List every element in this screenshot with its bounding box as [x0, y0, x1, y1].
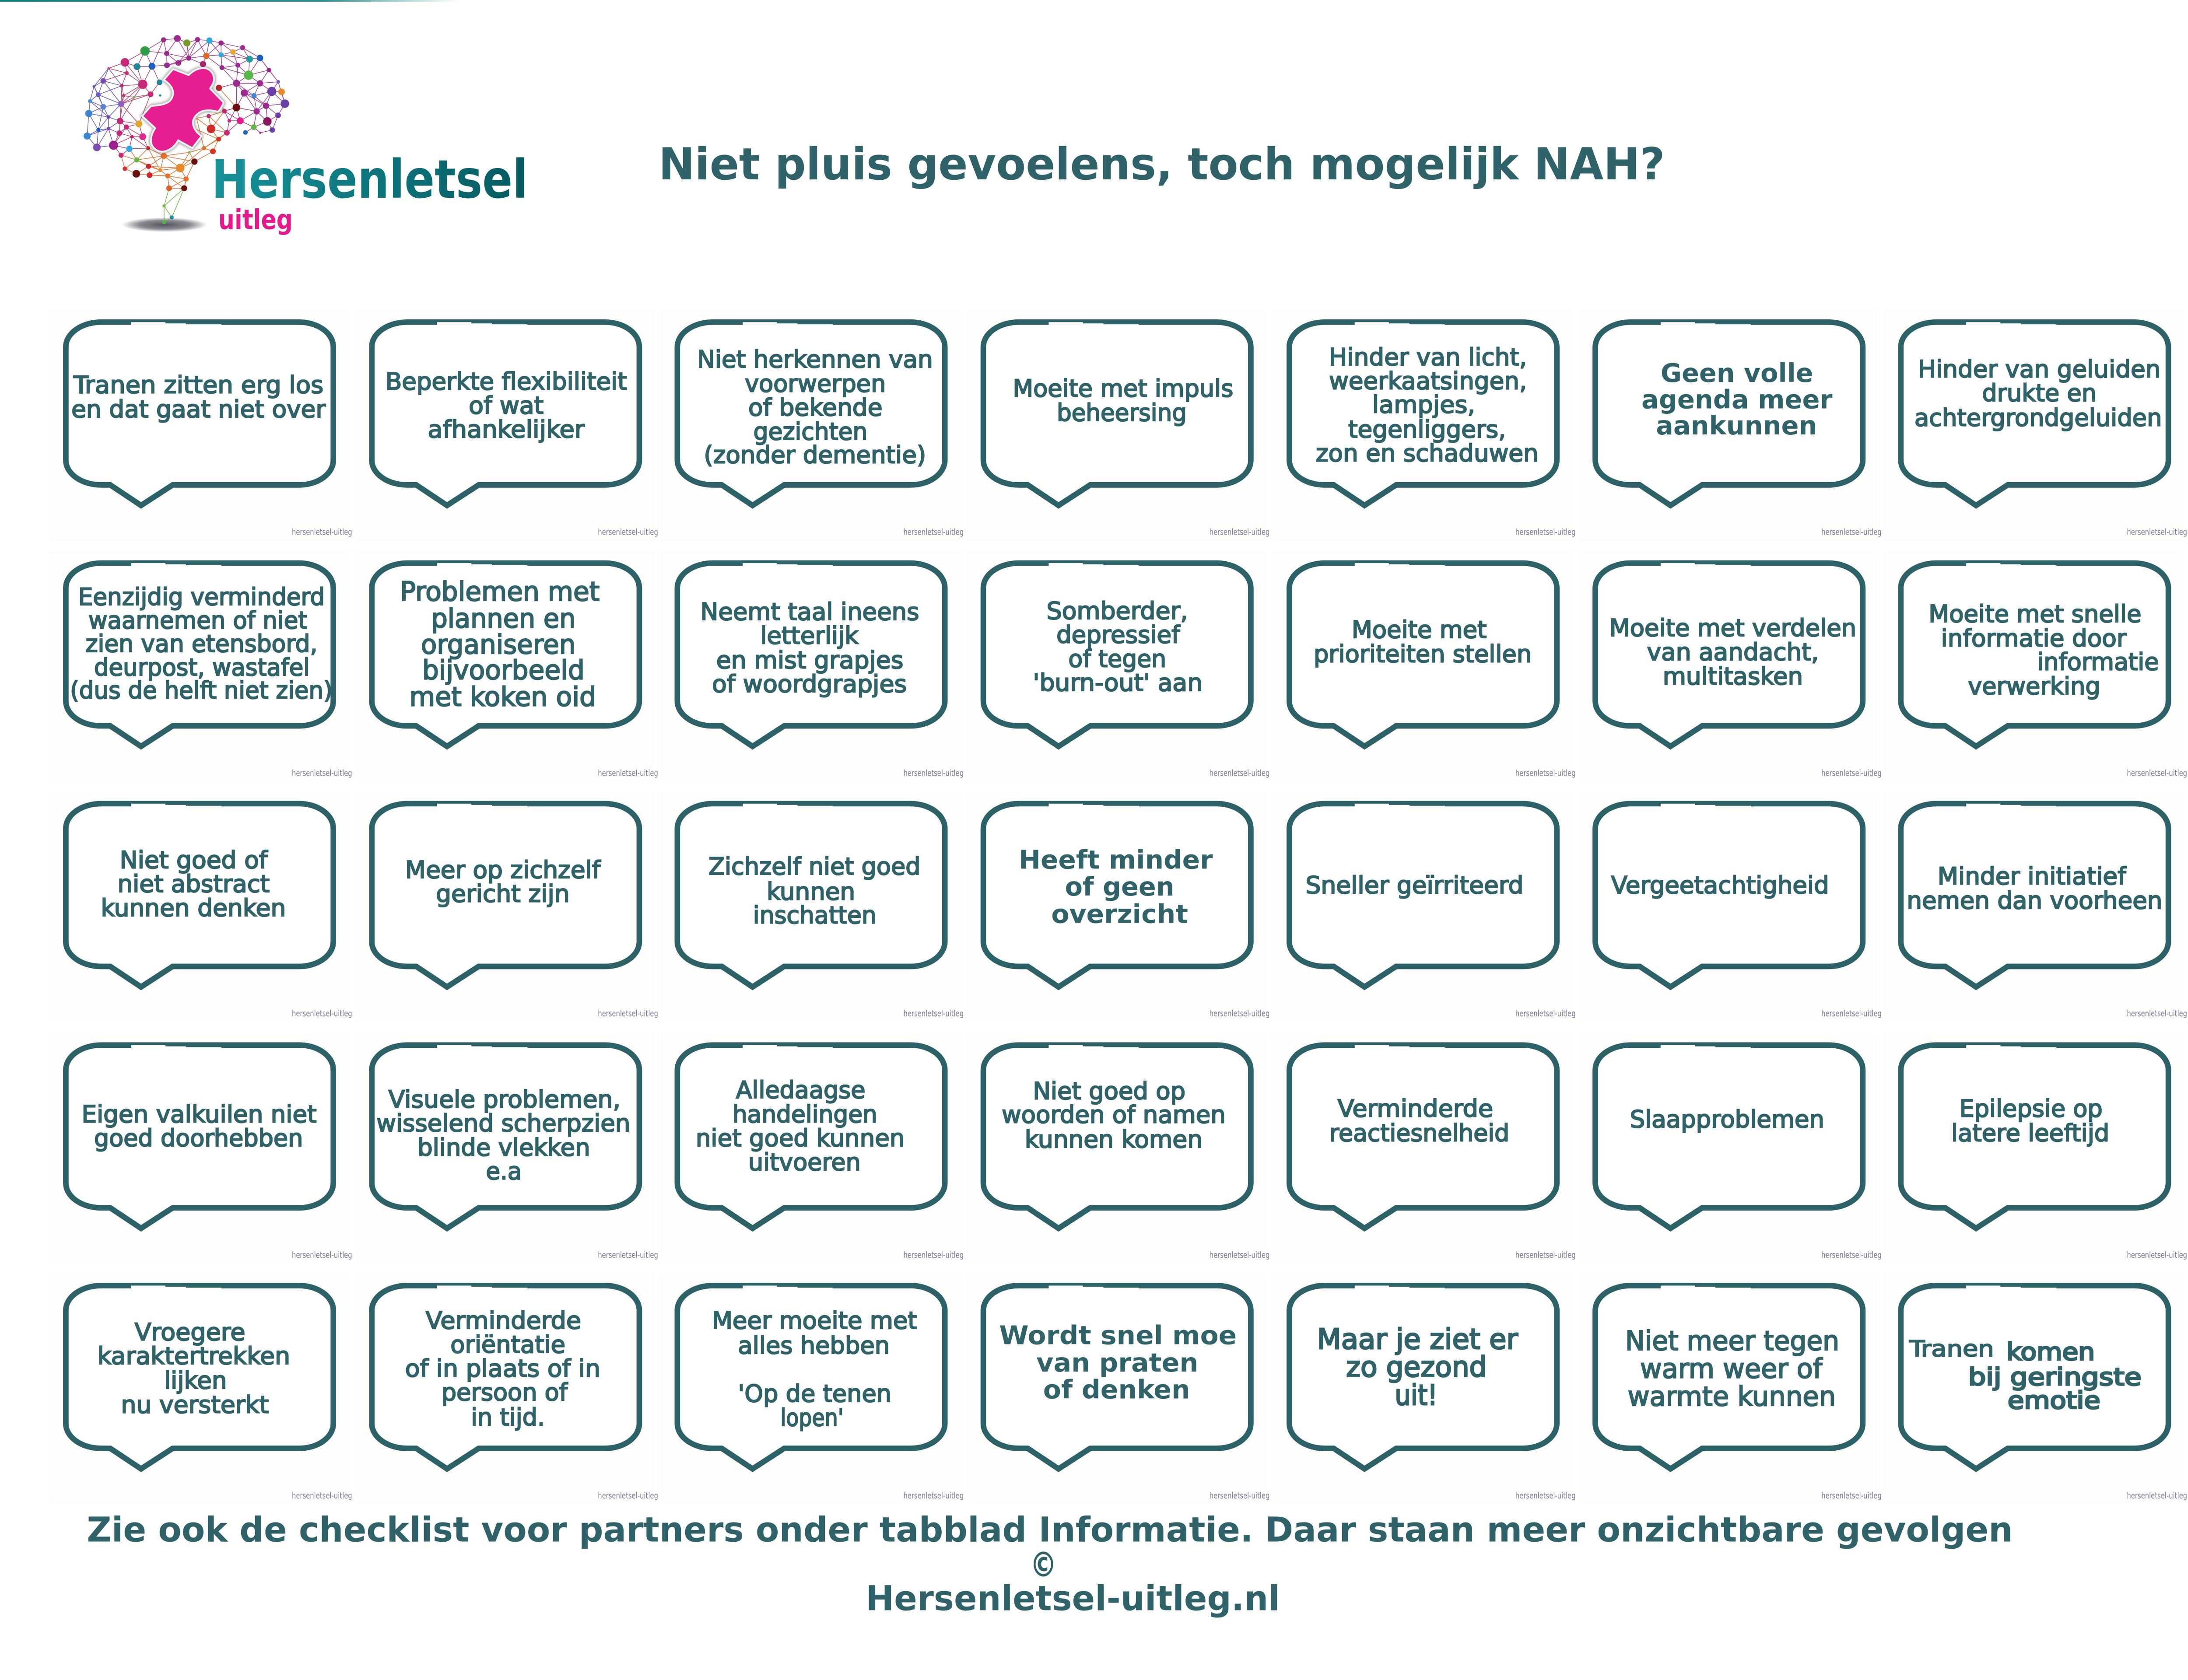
bubble: Verminderde oriëntatie: Verminderde — [426, 1306, 581, 1334]
bubble: Niet meer tegen warm weer: warm weer of — [1640, 1353, 1823, 1384]
bubble: Niet herkennen van voorwerpen: voorwerpen — [745, 370, 886, 398]
bubble: Minder initiatief: nemen dan voorheen — [1907, 886, 2162, 914]
bubble: Niet goed of niet abstract — [49, 791, 352, 1022]
bubble: Eenzijdig verminderd waarnemen: (dus de helft niet zien) — [70, 676, 333, 704]
bubble: Epilepsie op latere leeftijd: latere leeftijd — [1951, 1119, 2109, 1147]
bubble: Eigen valkuilen niet goed doorhebben — [49, 1032, 352, 1264]
bubble: Moeite met verdelen van aandacht: van aandacht, — [1647, 638, 1819, 666]
bubble: Alledaagse handelingen — [661, 1032, 964, 1264]
bubble: Niet meer tegen warm weer: hersenletsel-uitleg — [1821, 1491, 1882, 1501]
bubble: Tranen komen bij geringste emotie: Tranen — [1909, 1336, 1994, 1362]
bubble: Hinder van geluiden — [1884, 310, 2187, 540]
bubble: Heeft minder of geen overzicht: overzicht — [1051, 899, 1188, 929]
bubble: Problemen met plannen: plannen en — [431, 604, 575, 634]
top accent bar — [0, 0, 459, 2]
bubble: Zichzelf niet goed kunnen inschatten: hersenletsel-uitleg — [903, 1008, 964, 1018]
bubble: Niet meer tegen warm weer — [1578, 1273, 1882, 1504]
bubble: Niet goed of niet abstract: Niet goed of — [119, 846, 268, 874]
bubble: Heeft minder of geen overzicht — [967, 791, 1269, 1022]
bubble: Niet goed of niet abstract: kunnen denken — [101, 894, 286, 922]
bubble: Moeite met impuls beheersing: beheersing — [1057, 399, 1187, 427]
bubble: Minder initiatief — [1884, 791, 2187, 1022]
bubble: Niet goed op woorden — [967, 1032, 1269, 1264]
bubble: Geen volle agenda meer aankunnen: agenda meer — [1641, 385, 1833, 415]
bubble: Moeite met verdelen van aandacht: hersenletsel-uitleg — [1821, 768, 1882, 778]
bubble: Geen volle agenda meer aankunnen: Geen volle — [1661, 358, 1813, 388]
bubble: Moeite met prioriteiten stellen — [1273, 551, 1576, 781]
bubble: Problemen met plannen — [355, 551, 658, 781]
bubble: Vroegere karaktertrekken — [49, 1273, 352, 1504]
bubble: Meer moeite met alles hebben: hersenletsel-uitleg — [903, 1491, 964, 1501]
bubble: Hinder van licht: Hinder van licht, — [1329, 343, 1527, 371]
bubble: Slaapproblemen: hersenletsel-uitleg — [1821, 1250, 1882, 1260]
bubble: Slaapproblemen: Slaapproblemen — [1630, 1105, 1824, 1133]
bubble: Somberder, depressief: of tegen — [1068, 644, 1166, 672]
icon: brain network — [84, 35, 289, 224]
bubble: Niet herkennen van voorwerpen: Niet herkennen van — [697, 345, 933, 373]
bubble: Hinder van geluiden: achtergrondgeluiden — [1914, 404, 2162, 432]
bubble: Moeite met impuls beheersing: Moeite met impuls — [1013, 374, 1233, 402]
bubble: Somberder, depressief: hersenletsel-uitleg — [1210, 768, 1269, 778]
bubble: Vroegere karaktertrekken: hersenletsel-uitleg — [292, 1491, 352, 1501]
bubble: Vergeetachtigheid: Vergeetachtigheid — [1611, 871, 1829, 899]
bubble: Geen volle agenda meer aankunnen: hersenletsel-uitleg — [1821, 527, 1882, 537]
bubble: Niet herkennen van voorwerpen: (zonder dementie) — [704, 441, 926, 469]
bubble: Zichzelf niet goed kunnen inschatten: Zichzelf niet goed — [708, 852, 921, 880]
bubble: Moeite met prioriteiten stellen: prioriteiten stellen — [1314, 640, 1532, 668]
bubble: Beperkte flexibiliteit: afhankelijker — [428, 415, 585, 443]
logo wordmark: Hersenletsel — [211, 149, 528, 210]
bubble: Wordt snel moe — [967, 1273, 1269, 1504]
bubble: Somberder, depressief: depressief — [1056, 621, 1181, 649]
bubble: Hinder van licht — [1273, 310, 1576, 540]
bubble: Zichzelf niet goed kunnen inschatten — [661, 791, 964, 1022]
bubble: Verminderde oriëntatie: persoon of — [442, 1378, 568, 1406]
bubble: Verminderde reactiesnelheid: hersenletsel-uitleg — [1515, 1250, 1576, 1260]
bubble: Neemt taal ineens letterlijk: of woordgrapjes — [712, 670, 907, 698]
bubble: Moeite met verdelen van aandacht: multitasken — [1663, 662, 1803, 690]
bubble: Problemen met plannen: organiseren — [421, 630, 575, 660]
bubble: Visuele problemen: e.a — [486, 1157, 522, 1185]
bubble: Sneller geïrriteerd: Sneller geïrriteerd — [1305, 871, 1523, 899]
bubble: Eenzijdig verminderd waarnemen: zien van etensbord, — [85, 630, 318, 658]
bubble: Niet goed op woorden: kunnen komen — [1025, 1125, 1203, 1153]
bubble: Moeite met verdelen van aandacht — [1578, 551, 1882, 781]
bubble: Problemen met plannen: met koken oid — [410, 682, 596, 712]
bubble: Problemen met plannen: bijvoorbeeld — [422, 655, 585, 686]
bubble: Maar je ziet er zo gezond uit: uit! — [1395, 1379, 1438, 1412]
bubble: Eigen valkuilen niet goed doorhebben: Eigen valkuilen niet — [82, 1100, 317, 1128]
bubble: Eenzijdig verminderd waarnemen: Eenzijdig verminderd — [78, 583, 325, 611]
bubble: Moeite met prioriteiten stellen: Moeite met — [1352, 616, 1487, 644]
bubble: Hinder van licht: lampjes, — [1372, 390, 1475, 418]
bubble: Geen volle agenda meer aankunnen: aankunnen — [1656, 411, 1817, 441]
bubble: Niet herkennen van voorwerpen: gezichten — [754, 417, 867, 445]
bubble: Hinder van licht: tegenliggers, — [1348, 415, 1506, 443]
bubble: Hinder van geluiden: drukte en — [1982, 379, 2097, 407]
bubble: Niet herkennen van voorwerpen: of bekende — [748, 393, 883, 421]
bubble: Wordt snel moe: hersenletsel-uitleg — [1210, 1491, 1269, 1501]
title: Niet pluis gevoelens, toch mogelijk NAH? — [659, 139, 1665, 190]
bubble: Maar je ziet er zo gezond uit: hersenletsel-uitleg — [1515, 1491, 1576, 1501]
bubble: Eenzijdig verminderd waarnemen: deurpost, wastafel — [94, 653, 310, 681]
bubble: Eigen valkuilen niet goed doorhebben: hersenletsel-uitleg — [292, 1250, 352, 1260]
bubble: Meer op zichzelf gericht zijn: hersenletsel-uitleg — [598, 1008, 658, 1018]
bubble: Niet goed op woorden: Niet goed op — [1033, 1077, 1185, 1105]
icon: puzzle piece — [142, 68, 224, 152]
bubble: Epilepsie op latere leeftijd — [1884, 1032, 2187, 1264]
bubble: Tranen komen bij geringste emotie: komen — [2006, 1337, 2095, 1365]
bubble: Eigen valkuilen niet goed doorhebben: goed doorhebben — [94, 1124, 303, 1152]
bubble: Tranen komen bij geringste emotie: emotie — [2008, 1386, 2100, 1414]
bubble: Heeft minder of geen overzicht: of geen — [1065, 872, 1175, 902]
bubble: Neemt taal ineens letterlijk — [661, 551, 964, 781]
bubble: Wordt snel moe: van praten — [1036, 1348, 1198, 1378]
bubble: Niet meer tegen warm weer: Niet meer tegen — [1625, 1325, 1839, 1357]
bubble: Verminderde oriëntatie — [355, 1273, 658, 1504]
bubble: Neemt taal ineens letterlijk: en mist grapjes — [716, 646, 903, 674]
icon: stem shadow — [122, 217, 207, 232]
bubble: Eenzijdig verminderd waarnemen: hersenletsel-uitleg — [292, 768, 352, 778]
bubble: Verminderde oriëntatie: of in plaats of in — [405, 1354, 600, 1382]
bubble: Maar je ziet er zo gezond uit: zo gezond — [1346, 1351, 1487, 1383]
bubble: Visuele problemen: wisselend scherpzien — [376, 1109, 630, 1137]
bubble: Wordt snel moe: of denken — [1043, 1375, 1190, 1404]
bubble: Meer op zichzelf gericht zijn: gericht zijn — [436, 880, 570, 908]
bubble: Moeite met impuls beheersing: hersenletsel-uitleg — [1210, 527, 1269, 537]
bubble: Tranen zitten erg los — [49, 310, 352, 540]
bubble: Eenzijdig verminderd waarnemen: waarnemen of niet — [88, 606, 307, 634]
bubble: Somberder, depressief — [967, 551, 1269, 781]
bubble: Moeite met impuls beheersing — [967, 310, 1269, 540]
bubble: Alledaagse handelingen: uitvoeren — [748, 1148, 861, 1176]
bubble: Niet goed op woorden: woorden of namen — [1002, 1100, 1226, 1128]
bubble: Meer moeite met alles hebben: 'Op de tenen — [738, 1379, 891, 1407]
bubble: Wordt snel moe: Wordt snel moe — [999, 1320, 1237, 1350]
bubble: Neemt taal ineens letterlijk: hersenletsel-uitleg — [903, 768, 964, 778]
bubble: Visuele problemen: blinde vlekken — [417, 1134, 590, 1162]
bubble: Maar je ziet er zo gezond uit — [1273, 1273, 1576, 1504]
bubble: Alledaagse handelingen: niet goed kunnen — [696, 1124, 905, 1152]
bubble: Neemt taal ineens letterlijk: letterlijk — [760, 622, 859, 650]
bubble: Meer moeite met alles hebben: lopen' — [780, 1404, 844, 1432]
footer: website: Hersenletsel-uitleg.nl — [866, 1579, 1280, 1619]
bubble: Geen volle agenda meer aankunnen — [1578, 310, 1882, 540]
bubble: Vergeetachtigheid: hersenletsel-uitleg — [1821, 1008, 1882, 1018]
bubble: Moeite met snelle informatie: verwerking — [1968, 672, 2100, 700]
bubble: Niet goed op woorden: hersenletsel-uitleg — [1210, 1250, 1269, 1260]
bubble: Meer op zichzelf gericht zijn — [355, 791, 658, 1022]
bubble: Alledaagse handelingen: hersenletsel-uitleg — [903, 1250, 964, 1260]
bubble: Beperkte flexibiliteit: hersenletsel-uitleg — [598, 527, 658, 537]
bubble: Verminderde oriëntatie: hersenletsel-uitleg — [598, 1491, 658, 1501]
bubble: Beperkte flexibiliteit: of wat — [469, 391, 543, 419]
bubble: Beperkte flexibiliteit: Beperkte flexibiliteit — [386, 368, 627, 396]
bubble: Vroegere karaktertrekken: Vroegere — [135, 1318, 245, 1346]
bubble: Niet goed of niet abstract: hersenletsel-uitleg — [292, 1008, 352, 1018]
bubble: Maar je ziet er zo gezond uit: Maar je ziet er — [1317, 1323, 1518, 1356]
bubble: Tranen zitten erg los: hersenletsel-uitleg — [292, 527, 352, 537]
bubble: Sneller geïrriteerd: hersenletsel-uitleg — [1515, 1008, 1576, 1018]
bubble: Niet meer tegen warm weer: warmte kunnen — [1628, 1381, 1836, 1412]
bubble: Beperkte flexibiliteit — [355, 310, 658, 540]
bubble: Slaapproblemen — [1578, 1032, 1882, 1264]
bubble: Moeite met snelle informatie — [1884, 551, 2187, 781]
logo subtitle: uitleg — [218, 203, 293, 235]
bubble: Problemen met plannen: hersenletsel-uitleg — [598, 768, 658, 778]
bubble: Visuele problemen — [355, 1032, 658, 1264]
bubble: Hinder van licht: zon en schaduwen — [1316, 439, 1539, 467]
bubble: Moeite met snelle informatie: informatie door — [1941, 624, 2127, 652]
footer: copyright: © — [1030, 1545, 1057, 1585]
bubble: Zichzelf niet goed kunnen inschatten: inschatten — [753, 901, 877, 929]
bubble: Eenzijdig verminderd waarnemen — [49, 551, 352, 781]
bubble: Tranen komen bij geringste emotie: bij geringste — [1968, 1363, 2142, 1391]
bubble: Problemen met plannen: Problemen met — [400, 577, 600, 607]
bubble: Meer moeite met alles hebben — [661, 1273, 964, 1504]
bubble: Vroegere karaktertrekken: karaktertrekken — [98, 1342, 290, 1370]
bubble: Moeite met prioriteiten stellen: hersenletsel-uitleg — [1515, 768, 1576, 778]
bubble: Somberder, depressief: 'burn-out' aan — [1033, 668, 1203, 696]
bubble: Verminderde reactiesnelheid — [1273, 1032, 1576, 1264]
bubble: Meer op zichzelf gericht zijn: Meer op zichzelf — [405, 856, 601, 884]
bubble: Hinder van geluiden: Hinder van geluiden — [1918, 355, 2161, 383]
bubble: Niet herkennen van voorwerpen: hersenletsel-uitleg — [903, 527, 964, 537]
bubble: Tranen zitten erg los: en dat gaat niet over — [71, 395, 326, 423]
bubble: Neemt taal ineens letterlijk: Neemt taal ineens — [701, 598, 919, 626]
bubble: Hinder van licht: hersenletsel-uitleg — [1515, 527, 1576, 537]
bubble: Tranen zitten erg los: Tranen zitten erg los — [73, 371, 323, 399]
bubble: Epilepsie op latere leeftijd: Epilepsie op — [1960, 1095, 2103, 1123]
bubble: Heeft minder of geen overzicht: hersenletsel-uitleg — [1210, 1008, 1269, 1018]
bubble: Hinder van licht: weerkaatsingen, — [1329, 367, 1527, 395]
bubble: Niet goed of niet abstract: niet abstract — [118, 870, 270, 898]
bubble: Sneller geïrriteerd — [1273, 791, 1576, 1022]
bubble: Meer moeite met alles hebben: alles hebben — [738, 1331, 890, 1359]
bubble: Alledaagse handelingen: Alledaagse — [736, 1076, 866, 1104]
bubble: Moeite met snelle informatie: Moeite met snelle — [1929, 600, 2142, 628]
bubble: Verminderde reactiesnelheid: reactiesnelheid — [1329, 1119, 1509, 1147]
bubble: Moeite met snelle informatie: informatie — [2037, 648, 2159, 676]
bubble: Zichzelf niet goed kunnen inschatten: kunnen — [767, 878, 855, 906]
bubble: Meer moeite met alles hebben: Meer moeite met — [712, 1306, 917, 1334]
bubble: Heeft minder of geen overzicht: Heeft minder — [1019, 845, 1213, 875]
bubble: Vergeetachtigheid — [1578, 791, 1882, 1022]
bubble: Verminderde reactiesnelheid: Verminderde — [1338, 1095, 1493, 1123]
bubble: Somberder, depressief: Somberder, — [1047, 597, 1188, 625]
bubble: Moeite met verdelen van aandacht: Moeite met verdelen — [1609, 614, 1856, 642]
bubble: Minder initiatief: Minder initiatief — [1938, 862, 2127, 890]
bubble: Verminderde oriëntatie: oriëntatie — [450, 1330, 565, 1358]
bubble: Niet herkennen van voorwerpen — [661, 310, 964, 540]
bubble: Alledaagse handelingen: handelingen — [733, 1100, 877, 1128]
bubble: Visuele problemen: Visuele problemen, — [389, 1085, 621, 1113]
bubble: Vroegere karaktertrekken: lijken — [164, 1366, 227, 1394]
bubble: Tranen komen bij geringste emotie — [1884, 1273, 2187, 1504]
bubble: Vroegere karaktertrekken: nu versterkt — [121, 1390, 269, 1418]
bubble: Verminderde oriëntatie: in tijd. — [471, 1403, 545, 1431]
footer: checklist note: Zie ook de checklist voor partners onder tabblad Informatie. Daar staan meer onzichtbare gevolgen — [87, 1510, 2013, 1550]
logo: Hersenletsel uitleg — [84, 35, 528, 235]
bubble: Visuele problemen: hersenletsel-uitleg — [598, 1250, 658, 1260]
